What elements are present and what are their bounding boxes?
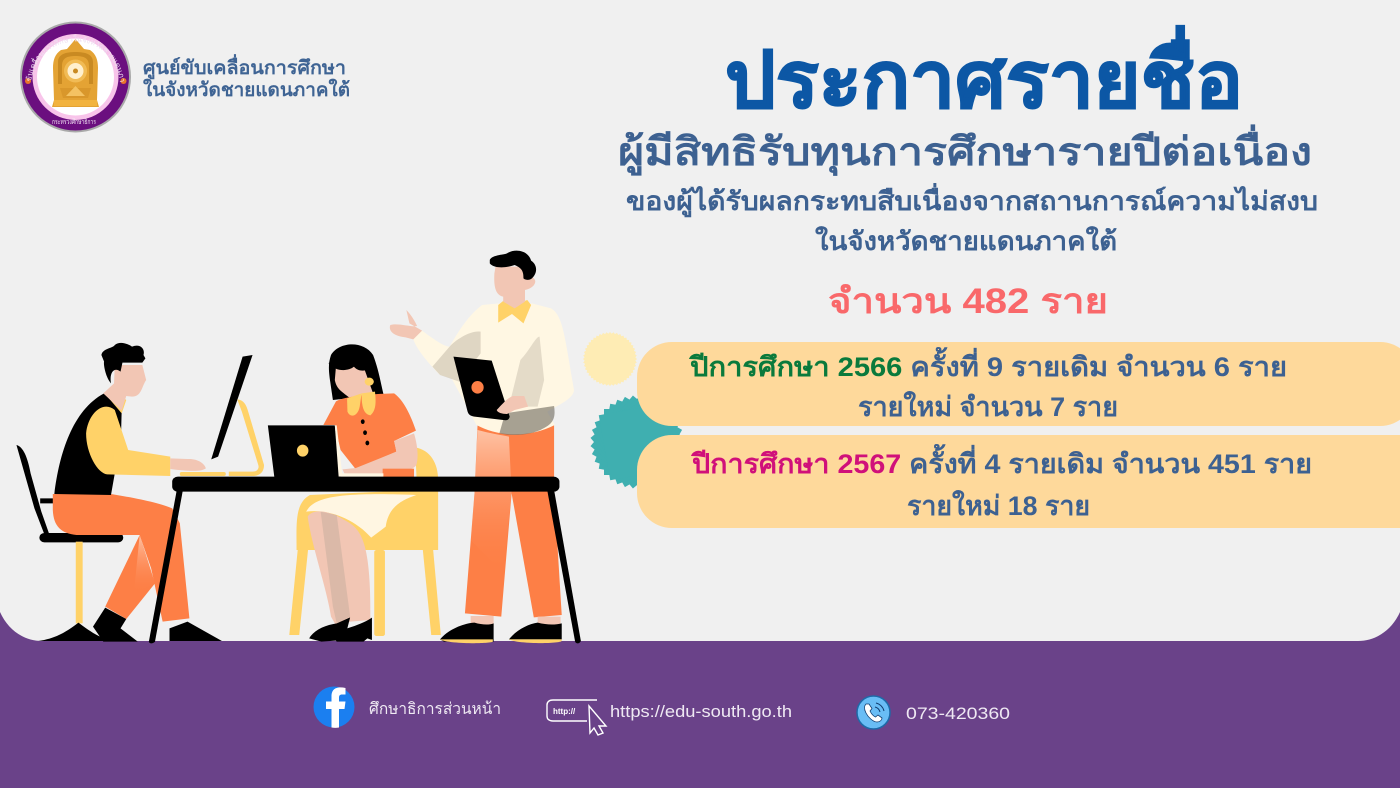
- description: ของผู้ได้รับผลกระทบสืบเนื่องจากสถานการณ์ความไม่สงบ: [626, 182, 1318, 218]
- icon: facebook: [314, 686, 354, 728]
- description: ในจังหวัดชายแดนภาคใต้: [815, 226, 1117, 256]
- logo emblem: กระทรวงศึกษาธิการ: [52, 117, 96, 126]
- laptop: [268, 425, 383, 477]
- icon: web address cursor: [547, 700, 606, 735]
- panel: academic year 2566: รายใหม่ จำนวน 7 ราย: [858, 391, 1118, 422]
- total count: จำนวน 482 ราย: [828, 282, 1108, 321]
- panel: academic year 2566: [637, 342, 1400, 426]
- panel: academic year 2567: รายใหม่ 18 ราย: [907, 490, 1090, 521]
- icon: web address cursor: http://: [553, 707, 576, 716]
- illustration: office team: [16, 251, 581, 643]
- organisation name: ศูนย์ขับเคลื่อนการศึกษา: [143, 54, 346, 80]
- description: [626, 182, 1318, 256]
- facebook page label: ศึกษาธิการส่วนหน้า: [369, 700, 501, 718]
- panel: academic year 2567: [637, 435, 1400, 528]
- decorative cream burst: [583, 332, 637, 386]
- desk: [149, 477, 581, 643]
- panel: academic year 2566: ปีการศึกษา 2566 ครั้งที่ 9 รายเดิม จำนวน 6 ราย: [688, 346, 1287, 382]
- organisation name: [143, 54, 350, 101]
- logo emblem: [20, 22, 131, 132]
- icon: phone: [857, 696, 890, 729]
- title: ประกาศรายชื่อ: [725, 25, 1243, 124]
- subtitle: ผู้มีสิทธิรับทุนการศึกษารายปีต่อเนื่อง: [618, 124, 1312, 176]
- organisation name: ในจังหวัดชายแดนภาคใต้: [143, 78, 350, 101]
- phone number: 073-420360: [906, 704, 1010, 723]
- standing man trousers: [465, 425, 562, 617]
- standing man: [390, 251, 574, 643]
- panel: academic year 2567: ปีการศึกษา 2567 ครั้งที่ 4 รายเดิม จำนวน 451 ราย: [690, 443, 1312, 479]
- woman seated: [289, 344, 441, 642]
- computer monitor: [180, 355, 264, 476]
- decorative teal burst: [591, 396, 683, 488]
- footer band: [0, 612, 1400, 788]
- website address: https://edu-south.go.th: [610, 702, 792, 721]
- man at desk: [16, 343, 222, 642]
